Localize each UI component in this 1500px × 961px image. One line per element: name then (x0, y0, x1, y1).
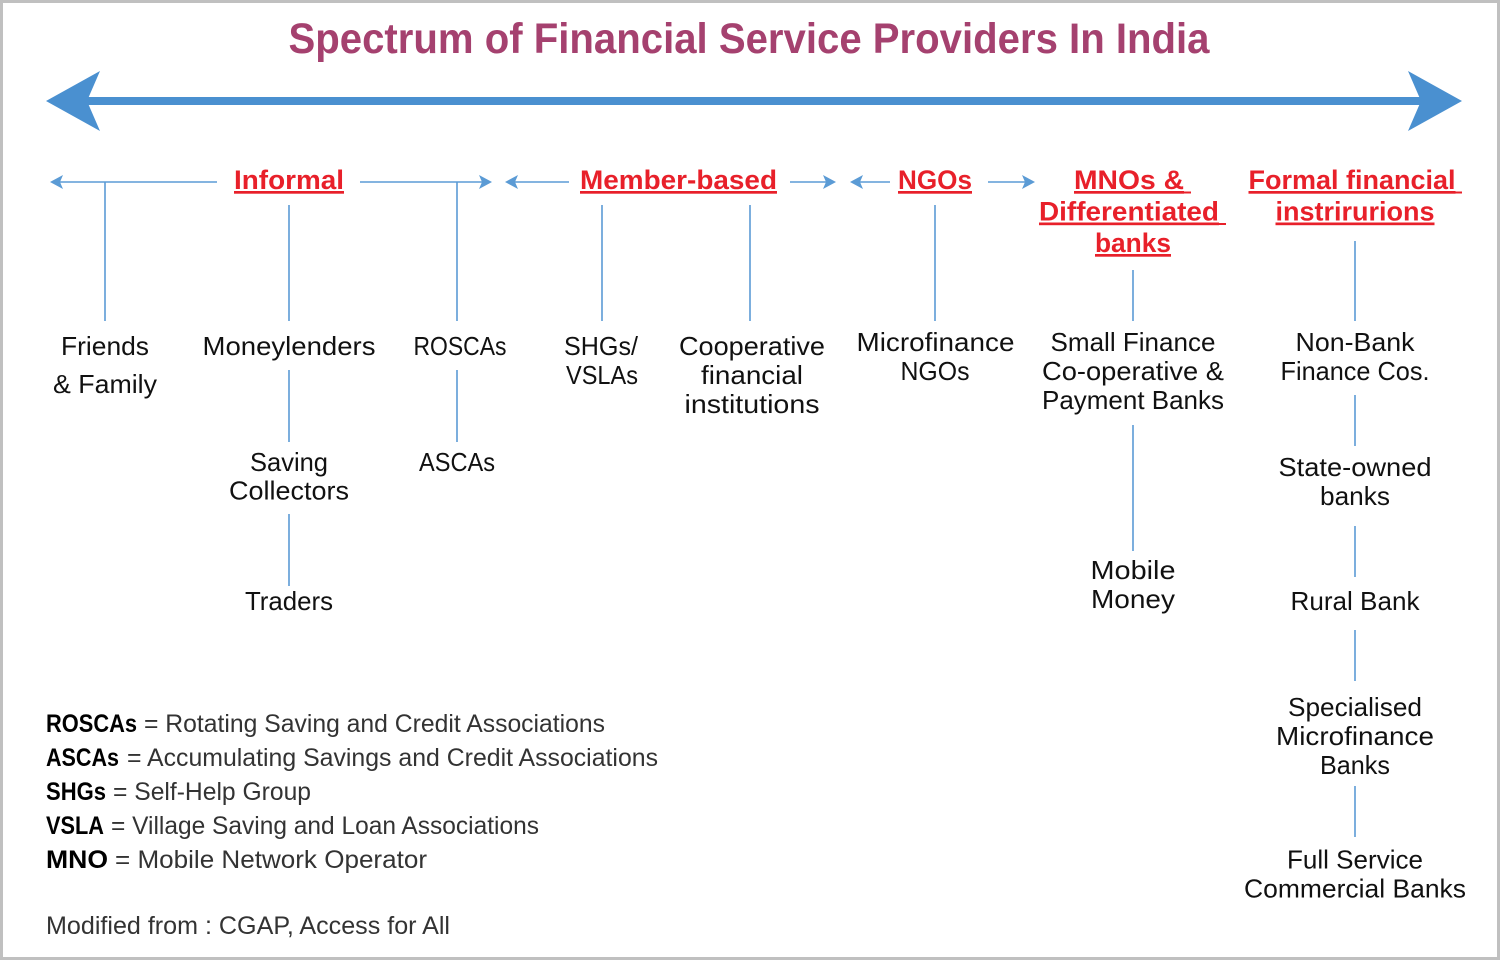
label: Moneylenders: Moneylenders (202, 331, 376, 361)
heading: Formal financial institutions (1248, 165, 1462, 226)
label: Traders: Traders (245, 586, 333, 616)
label: Friends & Family: Friends (61, 331, 149, 361)
heading: Formal financial institutions: Formal financial (1248, 165, 1456, 195)
label: Non-Bank Finance Cos.: Finance Cos. (1280, 356, 1430, 386)
label: Small Finance Co-operative & Payment Banks: Co-operative & (1042, 356, 1224, 386)
label: Mobile Money: Mobile (1090, 555, 1176, 585)
heading: Member-based: Member-based (580, 165, 777, 195)
legend: abbreviations: = Self-Help Group (113, 778, 311, 806)
label: Cooperative financial institutions: Cooperative (679, 331, 825, 361)
label: Specialised Microfinance Banks (1276, 692, 1434, 780)
label: Cooperative financial institutions (679, 331, 825, 419)
label: State-owned banks: State-owned (1278, 452, 1432, 482)
label: Small Finance Co-operative & Payment Banks: Payment Banks (1042, 385, 1224, 415)
arrow: NGOs (850, 175, 1035, 189)
legend: abbreviations: ASCAs (46, 744, 119, 772)
label: ROSCAs: ROSCAs (414, 331, 506, 361)
label: Non-Bank Finance Cos. (1280, 327, 1430, 386)
label: Saving Collectors: Collectors (229, 476, 349, 506)
label: Non-Bank Finance Cos.: Non-Bank (1296, 327, 1416, 357)
label: Microfinance NGOs: NGOs (900, 356, 970, 386)
arrow: informal (50, 175, 492, 189)
label: Full Service Commercial Banks: Commercial Banks (1244, 874, 1466, 904)
label: Full Service Commercial Banks: Full Service (1287, 844, 1423, 874)
label: SHGs/VSLAs: SHGs/ (564, 331, 639, 361)
label: SHGs/VSLAs: VSLAs (566, 360, 638, 390)
label: State-owned banks (1278, 452, 1432, 511)
label: Small Finance Co-operative & Payment Banks: Small Finance (1050, 327, 1216, 357)
legend: abbreviations: = Village Saving and Loan Associations (111, 812, 539, 840)
label: Specialised Microfinance Banks: Specialised (1288, 692, 1422, 722)
label: Saving Collectors: Saving (250, 447, 328, 477)
legend: abbreviations: VSLA (46, 812, 104, 840)
label: Mobile Money (1090, 555, 1176, 614)
label: Mobile Money: Money (1091, 584, 1175, 614)
legend: abbreviations: MNO (46, 846, 108, 874)
legend: abbreviations: SHGs (46, 778, 106, 806)
label: ASCAs: ASCAs (419, 447, 495, 477)
legend: abbreviations (46, 710, 658, 874)
label: Small Finance Co-operative & Payment Banks (1042, 327, 1224, 415)
source note: Modified from : CGAP, Access for All (46, 912, 450, 940)
heading: Formal financial institutions: instrirurions (1276, 196, 1434, 226)
heading: MNOs and differentiated banks: Differentiated (1039, 196, 1219, 226)
label: Friends & Family (53, 331, 157, 399)
label: Rural Bank: Rural Bank (1290, 586, 1420, 616)
label: Friends & Family: & Family (53, 369, 157, 399)
legend: abbreviations: ROSCAs (46, 710, 137, 738)
arrow: member-based (505, 175, 836, 189)
label: SHGs/VSLAs (564, 331, 639, 390)
title: Spectrum of Financial Service Providers In India (288, 15, 1211, 63)
label: Specialised Microfinance Banks: Banks (1320, 750, 1390, 780)
label: Full Service Commercial Banks (1244, 844, 1466, 904)
heading: NGOs: NGOs (898, 165, 972, 195)
heading: MNOs and differentiated banks: banks (1095, 228, 1171, 258)
legend: abbreviations: = Accumulating Savings and Credit Associations (127, 744, 658, 772)
heading: Informal: Informal (234, 165, 344, 195)
label: Microfinance NGOs (856, 327, 1014, 386)
legend: abbreviations: = Rotating Saving and Credit Associations (144, 710, 605, 738)
label: Saving Collectors (229, 447, 349, 506)
legend: abbreviations: = Mobile Network Operator (115, 846, 427, 874)
label: State-owned banks: banks (1320, 481, 1390, 511)
label: Cooperative financial institutions: financial (701, 360, 803, 390)
label: Microfinance NGOs: Microfinance (856, 327, 1014, 357)
label: Cooperative financial institutions: institutions (684, 389, 820, 419)
connector lines (105, 182, 1355, 837)
label: Specialised Microfinance Banks: Microfinance (1276, 721, 1434, 751)
heading: MNOs and differentiated banks: MNOs & (1074, 165, 1184, 195)
arrow: main spectrum (46, 71, 1462, 131)
heading: MNOs and differentiated banks (1039, 165, 1226, 258)
